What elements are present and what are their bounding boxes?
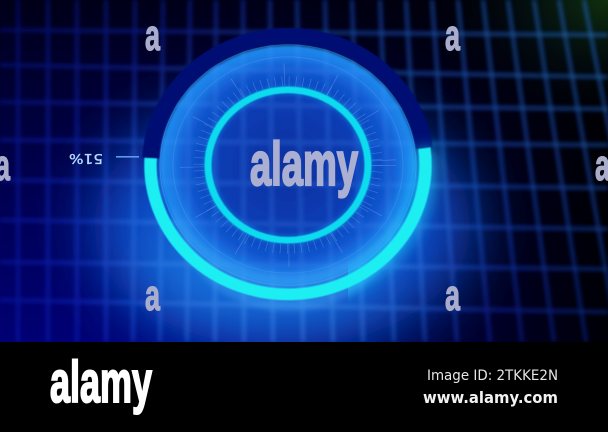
radial tick marks [192, 75, 384, 255]
inner segmented cyan ring [208, 90, 368, 240]
percent label, upside down: 51% [69, 150, 103, 165]
central watermark: alamy [250, 130, 358, 198]
lower dial highlight [172, 205, 404, 311]
watermark letters: a [145, 11, 160, 60]
image id: Image ID: 2TKKE2N [427, 368, 558, 384]
watermark letters: a [145, 271, 160, 320]
percent leader line [116, 156, 139, 158]
gauge dial [142, 27, 446, 312]
inner ring glow [208, 90, 368, 240]
glow of progress arc [150, 148, 425, 294]
thin dial outlines [160, 45, 416, 285]
outer progress track, dark upper arc [151, 36, 424, 158]
grid seen through the dial [162, 66, 412, 269]
website: www.alamy.com [423, 388, 558, 407]
footer logo: alamy [50, 350, 152, 415]
watermark letters: a [445, 271, 460, 320]
watermark letters [0, 11, 608, 320]
watermark letters: a [445, 11, 460, 60]
cyan progress arc, 51 percent [150, 148, 425, 294]
footer bar [0, 342, 608, 432]
dial disc [160, 45, 416, 285]
